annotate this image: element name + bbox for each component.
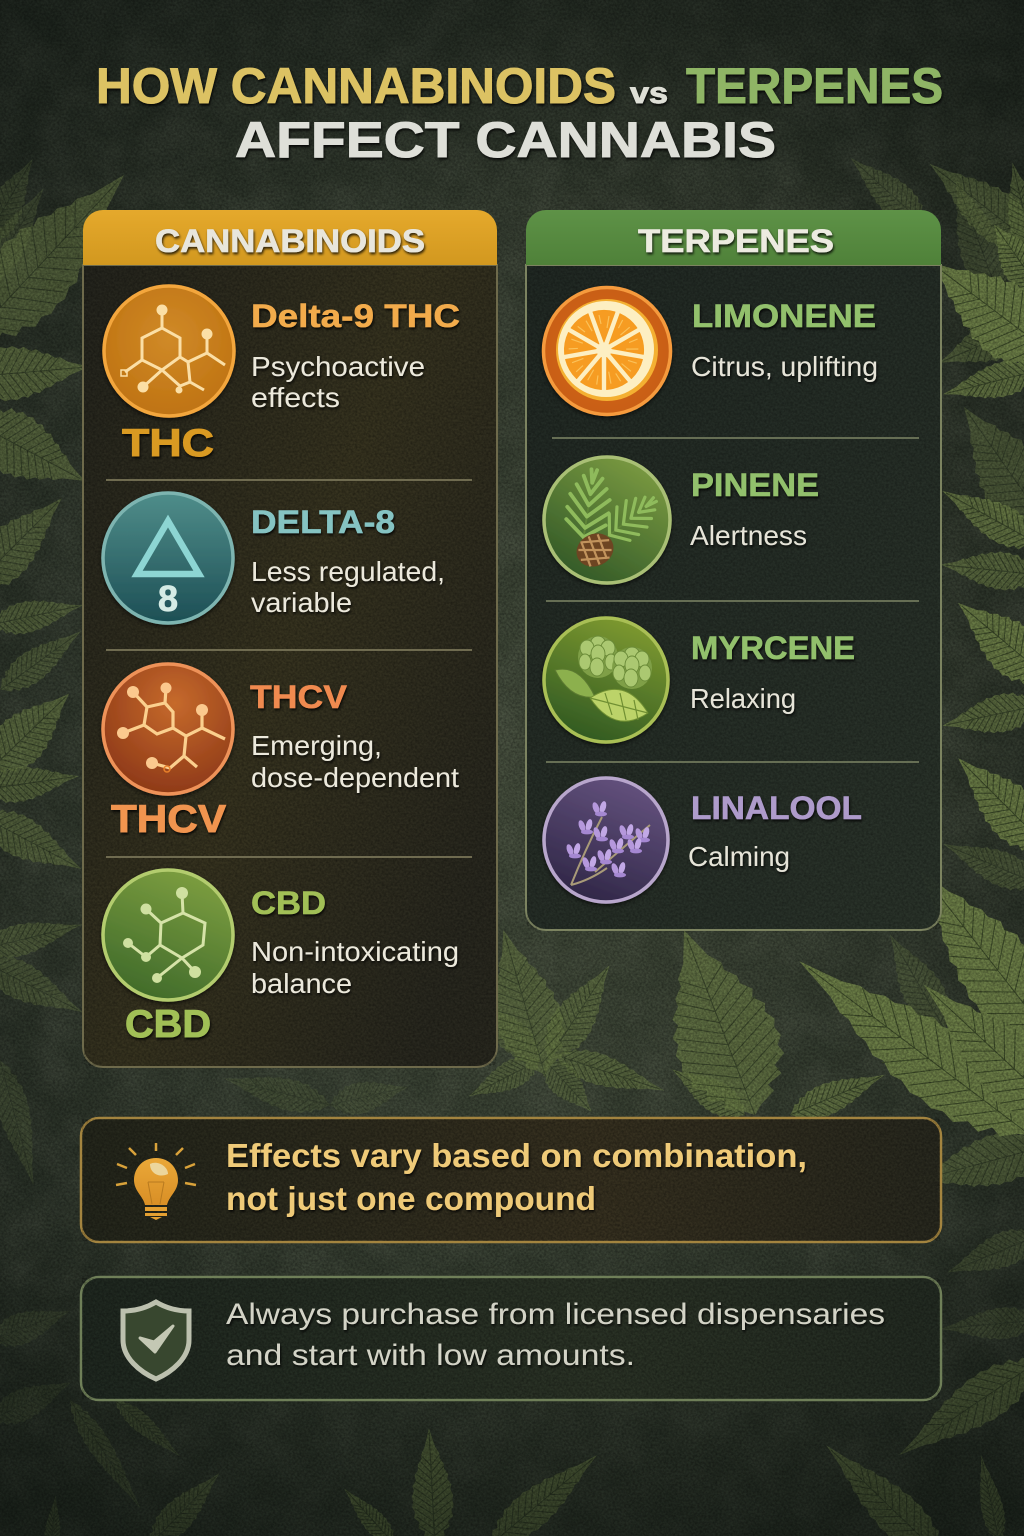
Limonene title: LIMONENE [692,298,876,334]
callout text: Always purchase from licensed dispensaries [226,1298,885,1331]
icon: pine branch and cone [544,457,670,583]
cannabinoids header [83,210,497,265]
Delta-8 title: DELTA-8 [251,504,395,540]
THC label: THC [122,422,214,465]
central leaf [460,921,669,1123]
title [96,58,943,168]
row: Limonene [544,288,878,414]
Pinene description: Alertness [690,520,807,551]
callout text [226,1298,885,1372]
THC description: effects [251,382,340,413]
THC title: Delta-9 THC [251,298,460,334]
CBD description: Non-intoxicating [251,936,459,967]
callout: effects [81,1118,941,1242]
icon: hops [544,618,668,742]
Limonene description: Citrus, uplifting [691,351,878,382]
lower centre leaf [635,911,891,1134]
callout: safety [81,1277,941,1400]
icon: light bulb [116,1143,196,1220]
CBD title: CBD [251,885,326,921]
THC description: Psychoactive [251,351,425,382]
cannabinoids header: CANNABINOIDS [155,223,425,259]
bottom leaflets [42,1340,1024,1536]
row: Delta-8 [103,493,445,623]
THCV description: Emerging, [251,730,382,761]
row: CBD [103,870,459,1046]
icon: THCV molecule [103,664,233,794]
Delta-8 description: variable [251,587,352,618]
Myrcene description: Relaxing [690,683,796,714]
terpenes header [526,210,941,265]
THCV title: THCV [250,679,348,715]
THCV label: THCV [111,798,226,841]
icon: lavender [544,778,668,902]
THCV description: dose-dependent [251,762,459,793]
title: HOW CANNABINOIDS [96,58,616,114]
CBD description [251,936,459,999]
title: vs [630,77,668,110]
Delta-8 description [251,556,445,618]
row: Linalool [544,778,862,902]
right leaflets [907,213,1024,869]
row: THC [104,286,460,465]
icon: delta 8: 8 [158,578,178,619]
panel: cannabinoids [83,210,497,1067]
row: THCV [103,664,459,841]
THCV description [251,730,459,793]
Linalool title: LINALOOL [691,790,862,826]
row: Pinene [544,457,819,583]
callout text [226,1137,807,1217]
row: Myrcene [544,618,855,742]
callout text: not just one compound [226,1180,596,1217]
icon: delta 8 [103,493,233,623]
title: AFFECT CANNABIS [235,112,776,168]
left leaflets [0,146,155,1029]
Linalool description: Calming [688,841,790,872]
icon: orange slice [544,288,670,414]
lower right leaf [776,844,1024,1166]
THC description [251,351,425,413]
terpenes header: TERPENES [638,223,834,259]
icon: CBD molecule [103,870,233,1000]
title: TERPENES [686,58,943,114]
CBD label: CBD [125,1003,211,1046]
CBD description: balance [251,968,352,999]
Myrcene title: MYRCENE [691,630,855,666]
panel: terpenes [526,210,941,930]
icon: shield [123,1302,189,1379]
callout text: and start with low amounts. [226,1339,635,1372]
icon: THC molecule [104,286,234,416]
Pinene title: PINENE [691,467,819,503]
callout text: Effects vary based on combination, [226,1137,807,1174]
Delta-8 description: Less regulated, [251,556,445,587]
